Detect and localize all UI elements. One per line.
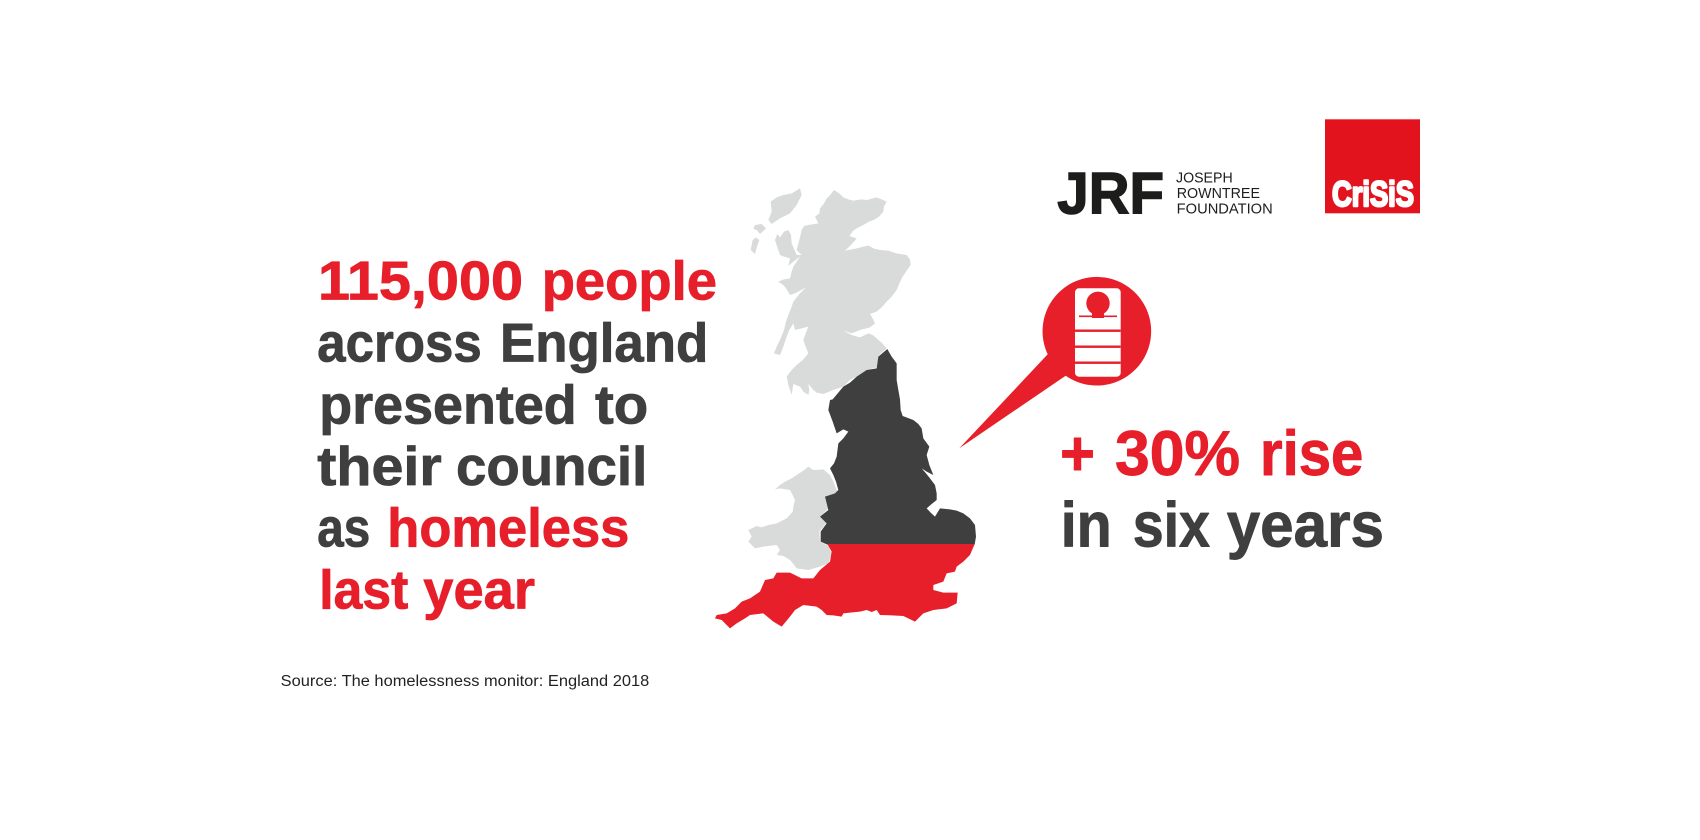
headline text block: homeless: [387, 497, 629, 559]
headline text block: their: [317, 435, 442, 497]
statistic: 30% rise: in: [1061, 491, 1112, 561]
statistic: 30% rise: years: [1227, 491, 1384, 561]
statistic: 30% rise: [1060, 419, 1384, 561]
headline text block: 115,000: [318, 249, 523, 311]
headline text block: people: [542, 249, 717, 311]
logo: Joseph Rowntree Foundation: JOSEPH: [1176, 171, 1233, 187]
map: Scotland: [751, 188, 911, 395]
headline text block: presented: [319, 373, 577, 435]
headline text block: as: [317, 497, 370, 559]
headline text block: England: [500, 312, 708, 374]
map of Great Britain: [715, 188, 976, 628]
headline text block: council: [456, 435, 647, 497]
icon: sleeping bag: [1075, 288, 1121, 377]
headline text block: across: [317, 312, 482, 374]
logo: Joseph Rowntree Foundation: [1057, 161, 1273, 226]
map: southern England in red: [715, 544, 975, 628]
logo: Crisis: CriSiS: [1332, 175, 1414, 214]
source note: Source: The homelessness monitor: England 2018: [281, 673, 649, 690]
logo: Joseph Rowntree Foundation: ROWNTREE: [1177, 186, 1260, 202]
callout with sleeping bag icon: [959, 277, 1151, 448]
statistic: 30% rise: rise: [1260, 419, 1363, 489]
callout bubble and pointer: [959, 277, 1151, 448]
headline text block: to: [595, 373, 648, 435]
logo: Joseph Rowntree Foundation: JRF: [1057, 161, 1164, 226]
headline text block: year: [423, 558, 535, 620]
map: northern England in grey: [820, 349, 976, 545]
statistic: 30% rise: six: [1133, 491, 1210, 561]
logo: Crisis: [1325, 119, 1420, 214]
statistic: 30% rise: +: [1060, 419, 1095, 489]
headline text block: [317, 249, 717, 620]
map: Wales: [748, 467, 839, 570]
headline text block: last: [319, 558, 408, 620]
statistic: 30% rise: 30%: [1115, 419, 1240, 489]
logo: Joseph Rowntree Foundation: FOUNDATION: [1177, 201, 1273, 217]
